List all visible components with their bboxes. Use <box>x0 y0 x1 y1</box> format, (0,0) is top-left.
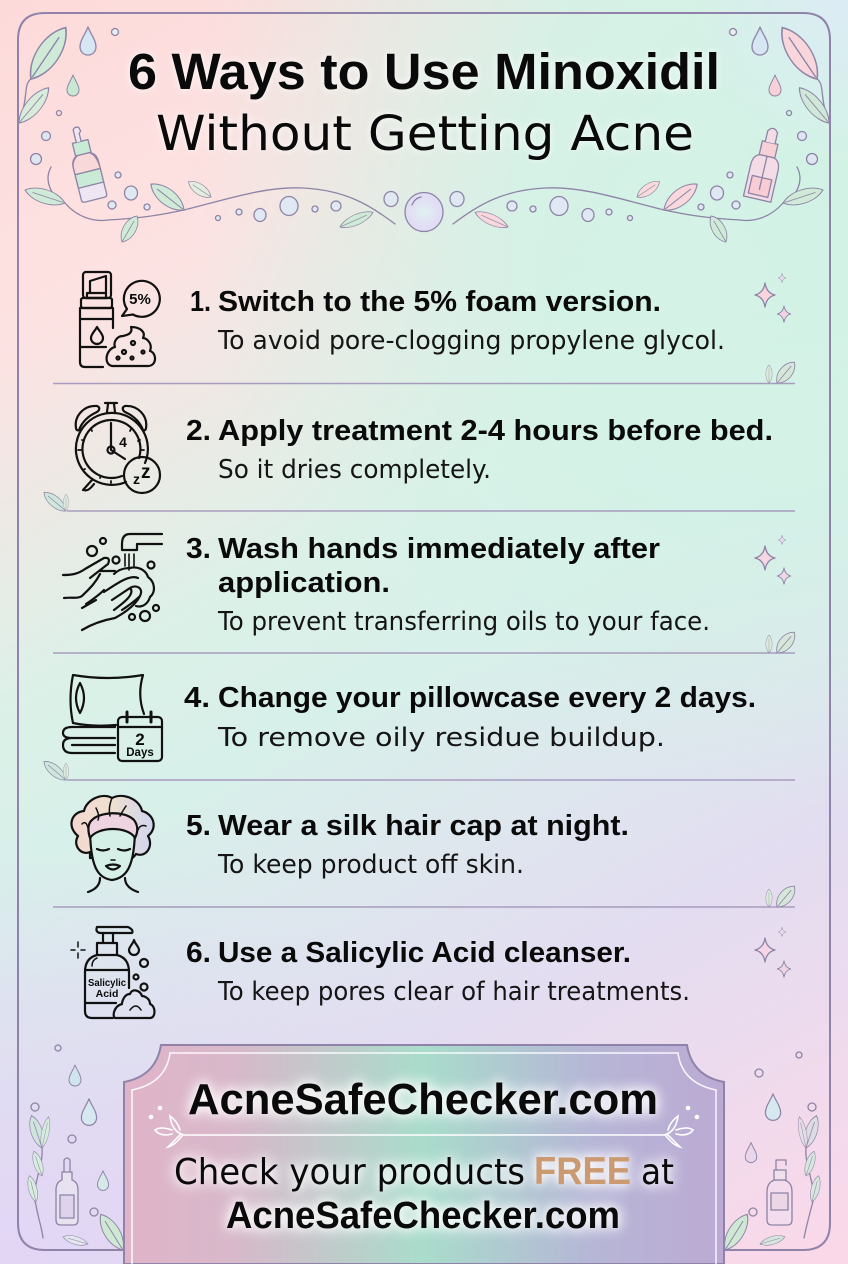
title <box>128 43 720 162</box>
tip 6 text: Use a Salicylic Acid cleanser. <box>218 937 631 969</box>
tip 2 text: 2. <box>186 415 211 447</box>
icon: pillow, towels and calendar <box>63 675 162 761</box>
banner subtext: AcneSafeChecker.com <box>226 1195 620 1237</box>
tip 2 text: Apply treatment 2-4 hours before bed. <box>218 415 773 447</box>
icon: foam bottle with 5% bubble: 5% <box>129 291 151 308</box>
decoration: sparkles tip 3 <box>755 535 791 584</box>
tip 2 text <box>186 415 773 485</box>
icon: alarm clock with zz: z <box>133 471 140 487</box>
tip 4 text: To remove oily residue buildup. <box>217 723 665 753</box>
title: Without Getting Acne <box>156 106 694 162</box>
tip 5 text: To keep product off skin. <box>217 850 524 880</box>
row dividers <box>53 384 795 907</box>
icon: salicylic acid cleanser pump: Acid <box>96 988 118 1000</box>
tip 6 text: 6. <box>186 937 211 969</box>
tip 1 text: 1. <box>190 286 211 318</box>
decoration: center pearl bubble <box>405 192 443 232</box>
icon: dropper bottle <box>743 125 787 202</box>
tip 5 text: 5. <box>186 810 211 842</box>
tip 2 text: So it dries completely. <box>218 455 491 485</box>
tip 6 text <box>186 937 690 1007</box>
icon: face with silk hair cap <box>71 796 154 892</box>
banner subtext: FREE <box>534 1150 631 1193</box>
decoration: leaf sprigs on dividers <box>41 358 799 911</box>
tip 3 text <box>186 533 710 637</box>
tip 3 text: To prevent transferring oils to your face. <box>217 607 710 637</box>
callout banner <box>124 1045 724 1264</box>
icon: pillow, towels and calendar: 2 <box>135 730 145 749</box>
icon: alarm clock with zz: 4 <box>119 434 127 450</box>
tip 1 text: To avoid pore-clogging propylene glycol. <box>217 326 725 356</box>
banner flourish divider <box>150 1106 698 1147</box>
tip 4 text: Change your pillowcase every 2 days. <box>218 682 756 714</box>
decoration: top left botanicals <box>13 21 398 245</box>
banner headline: AcneSafeChecker.com <box>188 1075 658 1124</box>
icon: pillow, towels and calendar: Days <box>126 747 154 759</box>
tip 1 text <box>190 286 725 356</box>
tip 4 text <box>184 682 756 753</box>
decoration: sparkles tip 1 <box>755 273 791 322</box>
banner subtext <box>174 1150 674 1237</box>
tip 3 text: application. <box>218 567 390 599</box>
banner subtext: at <box>641 1152 674 1193</box>
decoration: top right botanicals <box>450 21 835 245</box>
tip 5 text <box>186 810 629 880</box>
tip 4 text: 4. <box>184 682 210 714</box>
tip 3 text: 3. <box>186 533 211 565</box>
icon: alarm clock with zz: z <box>141 462 150 483</box>
title: 6 Ways to Use Minoxidil <box>128 43 720 100</box>
tip 1 text: Switch to the 5% foam version. <box>218 286 661 318</box>
tip 3 text: Wash hands immediately after <box>218 533 660 565</box>
icon: foam bottle with 5% bubble <box>80 272 160 367</box>
icon: lotion bottle <box>64 124 107 203</box>
tip 6 text: To keep pores clear of hair treatments. <box>217 977 690 1007</box>
icon: salicylic acid cleanser pump: Salicylic <box>88 977 126 989</box>
icon: salicylic acid cleanser pump <box>71 927 154 1018</box>
decoration: bottom left botanicals <box>25 1045 129 1254</box>
decoration: sparkles tip 6 <box>755 927 791 977</box>
icon: hand washing under faucet <box>63 534 162 630</box>
banner subtext: Check your products <box>174 1152 525 1193</box>
tip 5 text: Wear a silk hair cap at night. <box>218 810 629 842</box>
decoration: bottom right botanicals <box>719 1052 823 1254</box>
icon: alarm clock with zz <box>76 403 160 493</box>
